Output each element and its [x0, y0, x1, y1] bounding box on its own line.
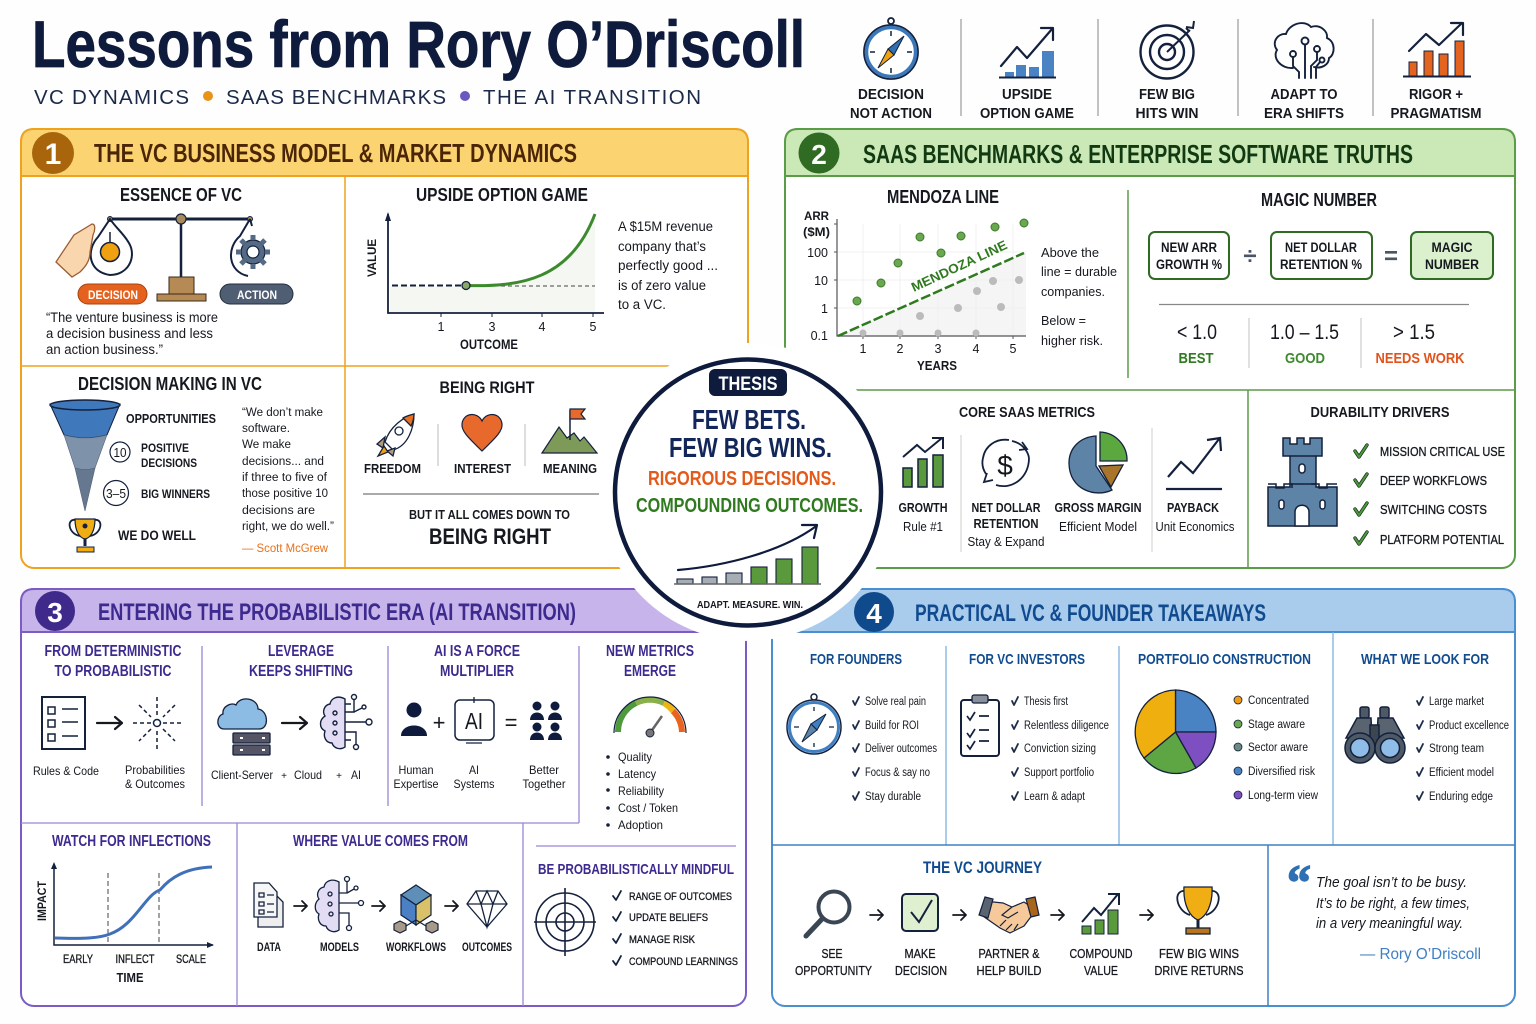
heading: for founders: FOR FOUNDERS	[810, 651, 902, 668]
flow: VC journey	[795, 887, 1244, 978]
quote: Rory O'Driscoll: — Rory O’Driscoll	[1360, 946, 1481, 963]
checklist: durability drivers: DEEP WORKFLOWS	[1380, 474, 1487, 488]
labels: flow: DATA	[257, 942, 281, 954]
labels: journey steps: PARTNER &	[978, 946, 1040, 961]
label: upside option game: OPTION GAME	[980, 106, 1074, 122]
panel number 1: 1	[45, 138, 61, 171]
thesis circle	[599, 343, 897, 641]
checklist: founders: Stay durable	[865, 791, 921, 803]
checklist: founders: Deliver outcomes	[865, 743, 937, 755]
labels: flow: OUTCOMES	[462, 942, 512, 954]
checklist: probabilistically mindful: MANAGE RISK	[629, 934, 696, 946]
labels: journey steps: COMPOUND	[1070, 946, 1132, 961]
funnel labels: 3–5	[106, 486, 126, 501]
icon: compass	[787, 694, 841, 754]
text: $15M revenue note: is of zero value	[618, 278, 706, 293]
quote: Rory O'Driscoll: It’s to be right, a few times,	[1316, 896, 1470, 912]
label: few big hits win: FEW BIG	[1139, 87, 1195, 103]
labels: journey steps: VALUE	[1084, 963, 1118, 978]
checklist: founders: Solve real pain	[865, 696, 926, 708]
icon: cloud and server	[218, 699, 270, 755]
formula: magic number	[1149, 232, 1493, 279]
heading: deterministic to probabilistic	[44, 643, 182, 680]
funnel labels: 10	[114, 445, 126, 460]
quote: Rory O'Driscoll: The goal isn’t to be busy.	[1316, 875, 1467, 891]
chart: portfolio pie	[1135, 690, 1216, 773]
chart: upside option payoff curve: 1	[438, 320, 445, 334]
labels: rules to probabilities	[33, 763, 185, 791]
subtitle	[34, 86, 701, 109]
checklist: investors: Learn & adapt	[1024, 791, 1086, 803]
labels: journey steps: FEW BIG WINS	[1159, 946, 1239, 961]
chart: Mendoza line scatter: 0.1	[811, 329, 828, 343]
funnel labels: OPPORTUNITIES	[126, 412, 216, 426]
heading: VC journey: THE VC JOURNEY	[923, 859, 1042, 877]
icon: human plus AI equals team: =	[505, 710, 517, 735]
icon: human plus AI equals team: +	[433, 710, 445, 735]
pill: decision	[78, 284, 147, 304]
icon: rocket	[377, 414, 414, 456]
text: we do well: WE DO WELL	[118, 527, 196, 543]
chart: Mendoza line scatter: 5	[1010, 342, 1017, 356]
formula: magic number: RETENTION %	[1280, 257, 1362, 272]
quote: Scott McGrew: those positive 10	[242, 486, 328, 500]
quote: Rory O'Driscoll: “	[1287, 854, 1311, 910]
funnel labels: POSITIVE	[141, 441, 189, 455]
icon: gross margin pie	[1069, 432, 1127, 493]
label: upside option game	[980, 87, 1074, 122]
list: new metrics	[606, 750, 678, 832]
benchmark scale: < 1.0	[1177, 321, 1217, 344]
icon: rigor chart	[1403, 23, 1471, 76]
icon: net dollar retention	[982, 440, 1029, 486]
metric labels	[898, 501, 1234, 549]
tagline: ADAPT. MEASURE. WIN.	[697, 599, 803, 611]
callout: being right: BEING RIGHT	[429, 524, 551, 549]
quote: Scott McGrew: We make	[242, 437, 291, 451]
checklist: look for: Efficient model	[1429, 767, 1494, 779]
chart: Mendoza line scatter: 2	[897, 342, 904, 356]
divider	[438, 424, 525, 466]
checklist: durability drivers: SWITCHING COSTS	[1380, 503, 1487, 517]
pill: action	[220, 284, 293, 304]
heading: mendoza line: MENDOZA LINE	[887, 187, 999, 207]
labels: human AI better together	[394, 763, 566, 791]
checklist: investors: Thesis first	[1024, 696, 1069, 708]
metric labels: PAYBACK	[1167, 501, 1219, 515]
value labels	[364, 462, 597, 476]
legend: portfolio: Sector aware	[1248, 742, 1308, 754]
metric labels: GROWTH	[898, 501, 948, 515]
quote: Scott McGrew: software.	[242, 421, 290, 435]
icon: diamond outcome	[467, 891, 507, 927]
chart: upside option payoff curve	[365, 212, 604, 352]
benchmark scale: 1.0 – 1.5	[1270, 321, 1339, 344]
thesis statement: FEW BETS.	[692, 404, 806, 435]
labels: journey steps: OPPORTUNITY	[795, 963, 872, 978]
labels: client-server to AI: +	[336, 771, 342, 782]
legend: portfolio: Concentrated	[1248, 695, 1309, 707]
label: upside option game: UPSIDE	[1002, 87, 1052, 103]
icon: handshake	[979, 897, 1039, 933]
labels: rules to probabilities: & Outcomes	[125, 777, 185, 791]
chart: upside option payoff curve: 5	[590, 320, 597, 334]
label: adapt to era shifts	[1264, 87, 1344, 122]
formula: magic number: MAGIC	[1432, 240, 1473, 255]
quote: venture business: an action business.”	[46, 342, 163, 357]
chart: upside option payoff curve: 3	[489, 320, 496, 334]
icon: clipboard	[961, 695, 999, 756]
checklist: founders: Build for ROI	[865, 720, 919, 732]
chart: Mendoza line scatter: 10	[814, 274, 828, 288]
funnel labels: BIG WINNERS	[141, 487, 210, 501]
label: rigor + pragmatism	[1390, 87, 1482, 122]
panel heading 1: THE VC BUSINESS MODEL & MARKET DYNAMICS	[94, 138, 577, 168]
panel number 4: 4	[866, 598, 882, 629]
checklist: durability drivers	[1355, 445, 1505, 547]
icon: net dollar retention: $	[997, 450, 1013, 481]
chart: Mendoza line scatter: 100	[807, 246, 828, 260]
icon: decision compass	[864, 18, 918, 79]
labels: human AI better together: AI	[469, 763, 479, 777]
chart: S-curve: INFLECT	[116, 952, 155, 966]
quote: Scott McGrew: decisions are	[242, 503, 315, 517]
formula: magic number: GROWTH %	[1156, 257, 1222, 272]
icon: mountain with flag	[542, 409, 597, 453]
heading: AI force multiplier: MULTIPLIER	[440, 663, 514, 680]
heading: what we look for: WHAT WE LOOK FOR	[1361, 651, 1489, 668]
labels: client-server to AI: Cloud	[294, 768, 322, 782]
chart: Mendoza line scatter: 3	[935, 342, 942, 356]
labels: human AI better together: Better	[529, 763, 559, 777]
funnel labels	[104, 412, 216, 506]
text: mendoza note: Below =	[1041, 313, 1086, 328]
labels: rules to probabilities: Probabilities	[125, 763, 185, 777]
funnel labels: DECISIONS	[141, 456, 197, 470]
icon: gauge	[614, 697, 686, 737]
checklist: founders: Focus & say no	[865, 767, 930, 779]
icon: models brain	[315, 876, 364, 932]
value labels: FREEDOM	[364, 462, 421, 476]
pill: action: ACTION	[237, 288, 277, 302]
formula: magic number: =	[1384, 243, 1398, 270]
legend: portfolio: Diversified risk	[1248, 766, 1315, 778]
list: new metrics: Quality	[618, 750, 652, 764]
callout: being right: BUT IT ALL COMES DOWN TO	[409, 508, 570, 522]
label: decision not action: DECISION	[858, 87, 924, 103]
checklist: look for	[1417, 696, 1509, 803]
heading: new metrics: NEW METRICS	[606, 643, 694, 660]
chart: compounding bars	[674, 525, 821, 584]
quote: Scott McGrew: decisions... and	[242, 454, 324, 468]
heading: being right: BEING RIGHT	[440, 378, 535, 397]
heading: where value comes from: WHERE VALUE COMES FROM	[293, 833, 468, 850]
icon: trophy	[1177, 887, 1219, 934]
labels: flow	[257, 942, 512, 954]
heading: for VC investors: FOR VC INVESTORS	[969, 651, 1085, 668]
heading: AI force multiplier	[434, 643, 520, 680]
text: $15M revenue note: A $15M revenue	[618, 219, 713, 234]
icon: human plus AI equals team: AI	[465, 708, 483, 734]
label: few big hits win	[1136, 87, 1198, 122]
heading: deterministic to probabilistic: TO PROBABILISTIC	[54, 663, 172, 680]
heading: deterministic to probabilistic: FROM DETERMINISTIC	[44, 643, 182, 660]
chart: upside option payoff curve: VALUE	[365, 239, 379, 277]
icon: rules checklist	[42, 697, 85, 749]
heading: decision making: DECISION MAKING IN VC	[78, 374, 262, 394]
icon: target	[1140, 21, 1194, 78]
value labels: INTEREST	[454, 462, 511, 476]
list: new metrics: Cost / Token	[618, 801, 678, 815]
chart: upside option payoff curve: 4	[539, 320, 546, 334]
panel: SaaS benchmarks	[785, 129, 1515, 568]
heading: leverage: KEEPS SHIFTING	[249, 663, 353, 680]
panel heading 3: ENTERING THE PROBABILISTIC ERA (AI TRANSITION)	[98, 599, 576, 626]
chart: upside option payoff curve: OUTCOME	[460, 336, 518, 352]
chart: Mendoza line scatter: 1	[860, 342, 867, 356]
heading: leverage	[249, 643, 353, 680]
icon: workflows cube	[394, 885, 438, 933]
quote: Scott McGrew: right, we do well.”	[242, 519, 334, 533]
checklist: investors: Support portfolio	[1024, 767, 1094, 779]
chart: Mendoza line scatter: ARR	[804, 209, 829, 223]
legend: portfolio: Stage aware	[1248, 719, 1305, 731]
text: mendoza note: higher risk.	[1041, 333, 1103, 348]
icon: funnel	[50, 400, 120, 511]
labels: flow: MODELS	[320, 942, 359, 954]
value labels: MEANING	[543, 462, 597, 476]
icon: AI brain	[320, 694, 372, 750]
heading: durability drivers: DURABILITY DRIVERS	[1310, 404, 1450, 421]
panel: practical takeaways	[772, 589, 1515, 1006]
checklist: look for: Product excellence	[1429, 720, 1509, 732]
chart: S-curve: SCALE	[176, 952, 206, 966]
quote: venture business: “The venture business is more	[46, 310, 218, 325]
benchmark scale: BEST	[1178, 350, 1214, 367]
labels: human AI better together: Together	[522, 777, 566, 791]
thesis statement: FEW BIG WINS.	[669, 432, 832, 463]
heading: leverage: LEVERAGE	[268, 643, 334, 660]
quote: Scott McGrew	[242, 405, 334, 555]
icon: payback	[1166, 438, 1222, 489]
labels: journey steps: DECISION	[895, 963, 947, 978]
icon: decision vs action balance scale	[56, 214, 270, 301]
flow: data to outcomes	[254, 876, 512, 954]
heading: core SaaS metrics: CORE SAAS METRICS	[959, 404, 1095, 421]
heading: be probabilistically mindful: BE PROBABILISTICALLY MINDFUL	[538, 861, 734, 878]
thesis statement	[636, 404, 863, 517]
icon: decision checkbox	[902, 894, 938, 931]
label: decision not action	[850, 87, 932, 122]
labels: journey steps: DRIVE RETURNS	[1154, 963, 1244, 978]
panel heading 4: PRACTICAL VC & FOUNDER TAKEAWAYS	[915, 600, 1266, 627]
thesis badge	[709, 369, 787, 396]
metric labels: Rule #1	[903, 520, 943, 534]
icon: castle	[1268, 438, 1337, 526]
subtitle: THE AI TRANSITION	[483, 86, 701, 109]
title: Lessons from Rory O’Driscoll	[32, 7, 805, 81]
list: new metrics: Latency	[618, 767, 656, 781]
benchmark scale: > 1.5	[1393, 321, 1435, 344]
panel number 2	[798, 132, 840, 174]
quote: venture business	[46, 310, 218, 357]
text: $15M revenue note: company that’s	[618, 239, 706, 254]
checklist: durability drivers: PLATFORM POTENTIAL	[1380, 533, 1504, 547]
heading: portfolio construction: PORTFOLIO CONSTRUCTION	[1138, 651, 1311, 668]
panel number 3	[35, 591, 75, 631]
chart: Mendoza line scatter: ($M)	[803, 225, 830, 239]
icon: growth	[903, 438, 943, 487]
metric labels: GROSS MARGIN	[1054, 501, 1142, 515]
quote: Rory O'Driscoll	[1287, 854, 1481, 963]
label: adapt to era shifts: ERA SHIFTS	[1264, 106, 1344, 122]
labels: human AI better together: Human	[398, 763, 434, 777]
metric labels: Stay & Expand	[968, 535, 1045, 549]
icon: binoculars	[1345, 707, 1405, 763]
arrow	[97, 717, 122, 729]
quote: venture business: a decision business and less	[46, 326, 213, 341]
chart: S-curve: IMPACT	[35, 880, 49, 921]
labels: rules to probabilities: Rules & Code	[33, 764, 99, 778]
list: new metrics: Adoption	[618, 818, 663, 832]
panel: probabilistic era	[21, 589, 746, 1006]
label: decision not action: NOT ACTION	[850, 106, 932, 122]
callout: being right	[409, 508, 570, 549]
panel number 4	[854, 592, 894, 632]
label: adapt to era shifts: ADAPT TO	[1270, 87, 1338, 103]
icon: target crosshair	[534, 888, 596, 956]
checklist: founders	[853, 696, 937, 803]
benchmark scale: GOOD	[1285, 350, 1325, 367]
text: mendoza note: companies.	[1041, 284, 1105, 299]
chart: Mendoza line scatter: 1	[821, 302, 828, 316]
formula: magic number: NEW ARR	[1161, 240, 1217, 255]
text: $15M revenue note	[618, 219, 718, 312]
label: rigor + pragmatism: PRAGMATISM	[1390, 106, 1482, 122]
text: mendoza note: line = durable	[1041, 264, 1117, 279]
text: mendoza note	[1041, 245, 1117, 348]
icon: human plus AI equals team	[401, 697, 562, 743]
chart: S-curve: TIME	[116, 970, 144, 985]
heading: new metrics: EMERGE	[624, 663, 676, 680]
checklist: durability drivers: MISSION CRITICAL USE	[1380, 445, 1505, 459]
thesis badge: THESIS	[718, 374, 778, 395]
metric labels: Unit Economics	[1156, 520, 1234, 534]
labels: journey steps: SEE	[822, 946, 843, 961]
labels: human AI better together: Systems	[454, 777, 494, 791]
heading: essence of VC: ESSENCE OF VC	[120, 185, 242, 205]
heading: watch for inflections: WATCH FOR INFLECTIONS	[52, 833, 211, 850]
label: rigor + pragmatism: RIGOR +	[1409, 87, 1463, 103]
benchmark scale: NEEDS WORK	[1376, 350, 1465, 367]
icon: AI tree cloud	[1275, 23, 1334, 78]
labels: flow: WORKFLOWS	[386, 942, 446, 954]
icon: compound value	[1082, 894, 1119, 934]
formula: magic number: NUMBER	[1425, 257, 1479, 272]
icon: heart	[462, 415, 502, 451]
chart: S-curve	[35, 862, 214, 985]
checklist: investors: Relentless diligence	[1024, 720, 1109, 732]
chart: Mendoza line scatter: MENDOZA LINE	[909, 237, 1010, 295]
benchmark scale	[1177, 318, 1465, 368]
chart: S-curve: EARLY	[63, 952, 93, 966]
labels: client-server to AI: +	[281, 771, 287, 782]
chart: Mendoza line scatter: YEARS	[917, 358, 957, 373]
text: mendoza note: Above the	[1041, 245, 1099, 260]
panel number 1	[32, 132, 74, 174]
heading: magic number: MAGIC NUMBER	[1261, 190, 1377, 210]
icon: magnifier	[806, 892, 850, 936]
thesis statement: COMPOUNDING OUTCOMES.	[636, 495, 863, 517]
panel: VC business model	[21, 129, 748, 568]
labels: journey steps: MAKE	[904, 946, 936, 961]
icon: data documents	[254, 883, 283, 927]
arrow	[282, 717, 307, 729]
quote: Scott McGrew: — Scott McGrew	[242, 543, 329, 555]
legend: portfolio: Long-term view	[1248, 790, 1319, 802]
legend: portfolio	[1234, 695, 1319, 802]
checklist: probabilistically mindful: COMPOUND LEARNINGS	[629, 956, 738, 968]
heading: new metrics	[606, 643, 694, 680]
formula: magic number: NET DOLLAR	[1285, 240, 1357, 255]
icon: probability burst	[133, 697, 181, 749]
quote: Scott McGrew: “We don’t make	[242, 405, 323, 419]
icon: upside chart	[999, 28, 1056, 78]
checklist: probabilistically mindful	[613, 891, 738, 968]
chart: Mendoza line scatter: 4	[973, 342, 980, 356]
checklist: probabilistically mindful: RANGE OF OUTCOMES	[629, 891, 732, 903]
thesis statement: RIGOROUS DECISIONS.	[648, 468, 836, 490]
checklist: investors: Conviction sizing	[1024, 743, 1096, 755]
subtitle: SAAS BENCHMARKS	[226, 86, 446, 109]
quote: Rory O'Driscoll: in a very meaningful way.	[1316, 916, 1463, 932]
formula: magic number: ÷	[1243, 243, 1257, 270]
labels: journey steps: HELP BUILD	[976, 963, 1042, 978]
pill: decision: DECISION	[88, 288, 138, 302]
metric labels: Efficient Model	[1059, 520, 1137, 534]
text: $15M revenue note: to a VC.	[618, 297, 666, 312]
text: $15M revenue note: perfectly good ...	[618, 258, 718, 273]
heading: upside option game: UPSIDE OPTION GAME	[416, 185, 588, 205]
list: new metrics: Reliability	[618, 784, 664, 798]
labels: client-server to AI	[211, 768, 361, 782]
checklist: look for: Strong team	[1429, 743, 1484, 755]
icon: trophy	[70, 519, 100, 552]
labels: journey steps	[795, 946, 1244, 978]
panel number 2: 2	[811, 139, 827, 170]
panel number 3: 3	[47, 597, 63, 628]
metric labels: RETENTION	[974, 517, 1038, 531]
checklist: look for: Large market	[1429, 696, 1485, 708]
labels: client-server to AI: Client-Server	[211, 768, 273, 782]
labels: human AI better together: Expertise	[394, 777, 439, 791]
quote: Scott McGrew: if three to five of	[242, 470, 328, 484]
chart: Mendoza line scatter	[803, 209, 1028, 373]
label: few big hits win: HITS WIN	[1136, 106, 1198, 122]
checklist: probabilistically mindful: UPDATE BELIEFS	[629, 912, 708, 924]
checklist: look for: Enduring edge	[1429, 791, 1493, 803]
subtitle: VC DYNAMICS	[34, 86, 189, 109]
checklist: investors	[1012, 696, 1109, 803]
labels: client-server to AI: AI	[351, 768, 361, 782]
top icon row	[850, 18, 1482, 122]
heading: AI force multiplier: AI IS A FORCE	[434, 643, 520, 660]
metric labels: NET DOLLAR	[972, 501, 1040, 515]
